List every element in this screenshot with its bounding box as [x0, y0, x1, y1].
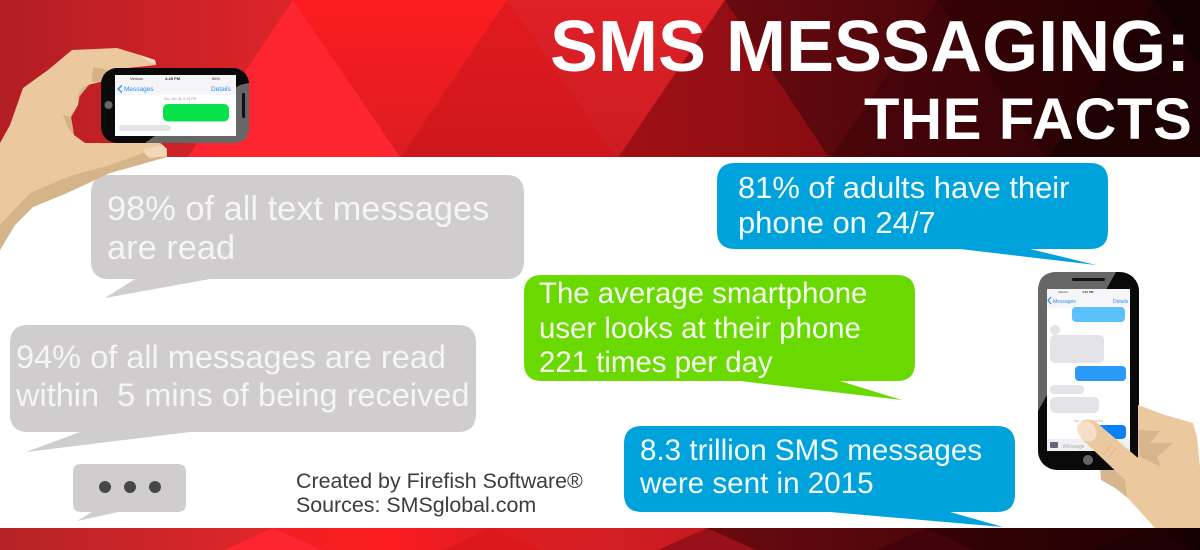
- illustration: hand holding phone vertically: [1038, 272, 1200, 528]
- bubble: 221 times: 221 times per day: [539, 346, 773, 379]
- phone: Messages: [124, 86, 154, 93]
- phone: Thu, Jan 28, 5:34 PM: [1074, 419, 1103, 423]
- phone: Verizon: [130, 76, 143, 81]
- phone: [1038, 272, 1139, 470]
- phone: 4:45 PM: [1082, 290, 1094, 294]
- credits: Created by Firefish Software®: [296, 469, 583, 493]
- illustration: hand holding phone horizontally: [0, 48, 249, 250]
- phone: 4:45 PM: [165, 76, 181, 81]
- phone: iMessage: [1063, 444, 1085, 450]
- hand and thumb: [1077, 405, 1200, 528]
- phone: Thu, Jan 28, 5:34 PM: [163, 97, 197, 101]
- phone: 66%: [212, 76, 220, 81]
- credits: Sources: SMSglobal.com: [296, 493, 536, 517]
- bubble: 8.3 trillion: were sent in 2015: [639, 467, 874, 500]
- bubble: 8.3 trillion: 8.3 trillion SMS messages: [640, 434, 982, 467]
- bubble: 221 times: user looks at their phone: [539, 312, 861, 345]
- bubble: 94% within 5 mins: 94% of all messages are read: [16, 339, 446, 375]
- bubble: 98% read: are read: [107, 229, 235, 267]
- phone: Details: [1113, 299, 1129, 305]
- bubble: 81% adults: 81% of adults have their: [738, 170, 1069, 205]
- phone: Messages: [1053, 299, 1076, 305]
- subtitle: THE FACTS: [864, 87, 1193, 152]
- header banner: [0, 0, 1200, 159]
- bubble: 98% read: [91, 175, 524, 298]
- phone: [101, 68, 249, 143]
- bubble: 221 times: The average smartphone: [539, 277, 867, 310]
- phone: Details: [211, 86, 232, 93]
- bubble: 81% adults: [717, 163, 1108, 265]
- bubble: 81% adults: phone on 24/7: [738, 205, 936, 240]
- footer banner: [0, 528, 1200, 550]
- phone: Verizon: [1058, 290, 1068, 294]
- title: SMS MESSAGING:: [550, 7, 1190, 87]
- bubble: 94% within 5 mins: within 5 mins of being received: [15, 377, 469, 413]
- bubble: 8.3 trillion: [624, 426, 1015, 527]
- bubble: 221 times: [524, 275, 915, 400]
- title: [550, 7, 1193, 152]
- bubble: 98% read: 98% of all text messages: [107, 190, 489, 228]
- bubble: typing dots: [73, 464, 186, 521]
- bubble: 94% within 5 mins: [10, 325, 476, 452]
